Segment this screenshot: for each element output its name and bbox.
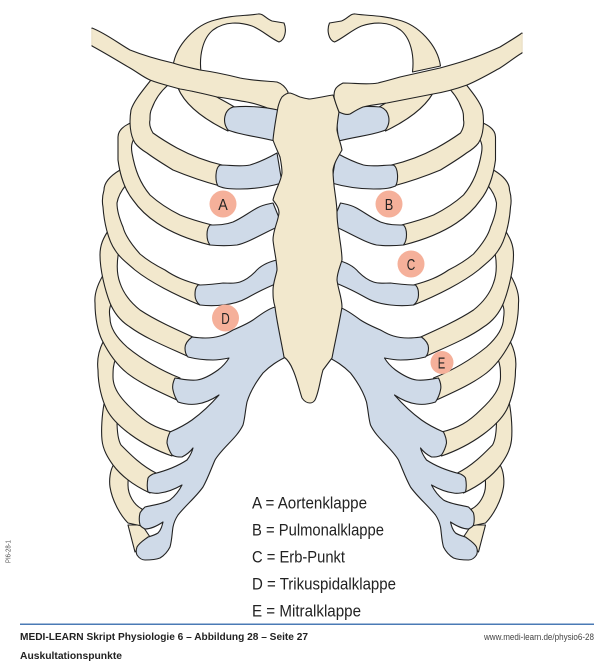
lower costal cartilage mass [136,305,290,560]
rib 4 [102,170,200,305]
left ribs [95,14,285,552]
cartilage 2 [216,153,282,189]
legend C: C = Erb-Punkt [252,548,345,566]
point C: C [407,257,415,274]
point A: A [218,197,228,214]
point B: B [385,197,393,214]
rib 3 [118,122,212,245]
rib 6 [95,272,180,400]
point A [210,190,236,218]
legend E: E = Mitralklappe [252,602,361,620]
cartilage 3 [207,203,282,246]
side code: PI6-28-1 [4,540,12,563]
point D: D [221,311,230,328]
legend A: A = Aortenklappe [252,494,367,512]
cartilage 1 [225,106,278,141]
right costal cartilages [324,106,477,560]
footer rule [20,624,594,625]
legend [252,494,396,620]
legend D: D = Trikuspidalklappe [252,576,396,594]
footer source: MEDI-LEARN Skript Physiologie 6 – Abbildung 28 – Seite 27 [20,631,308,643]
sternum [273,93,342,403]
legend B: B = Pulmonalklappe [252,522,384,540]
point E [430,351,454,374]
rib 2 [130,76,222,186]
rib 8 [102,404,156,493]
rib 1 arch [173,14,285,72]
rib 9 [110,464,142,526]
point D [212,304,239,332]
right ribs [328,14,519,552]
point C [398,250,424,278]
right clavicle [334,33,522,114]
point B [376,190,402,218]
footer title: Auskultationspunkte [20,650,122,662]
rib 5 [100,228,195,356]
point E: E [438,356,445,372]
cartilage 4 [195,258,285,306]
rib 10 [128,525,150,552]
left clavicle [92,28,288,113]
rib 7 [98,342,172,456]
rib 1 lower part [178,88,236,131]
left costal cartilages [136,106,290,560]
